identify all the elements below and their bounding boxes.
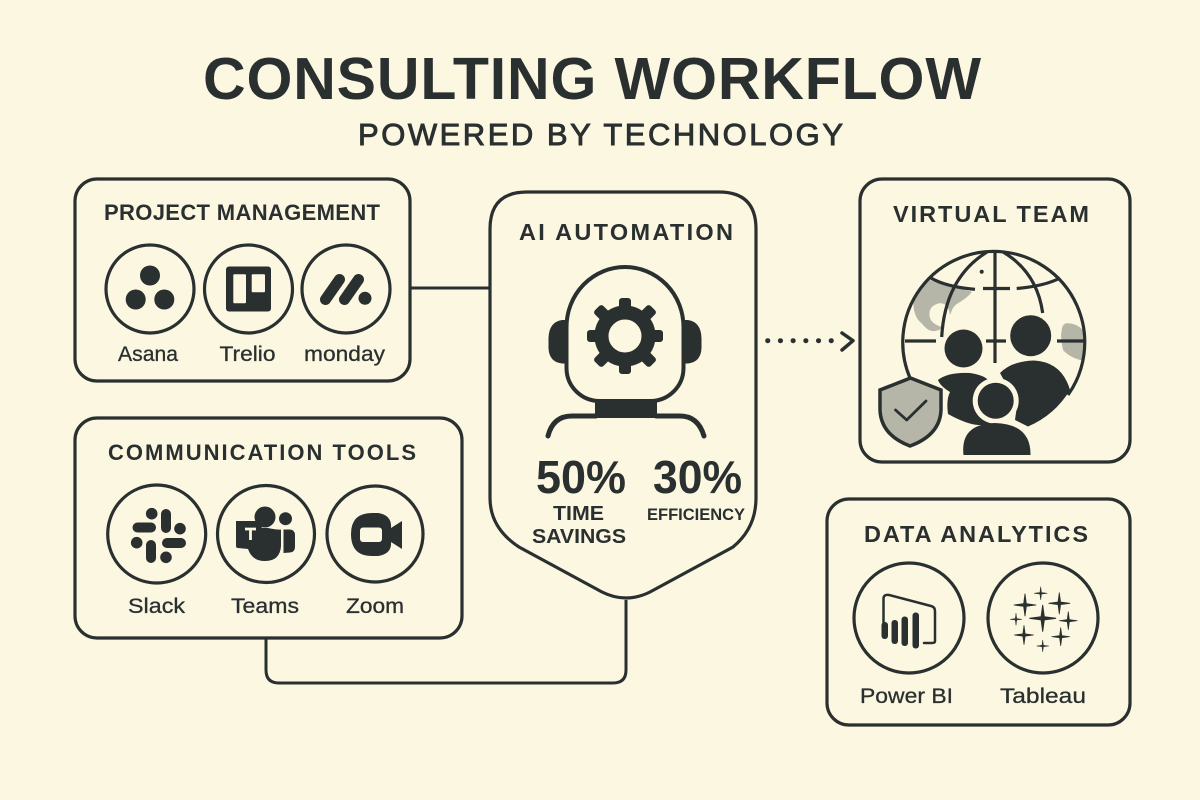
title: CONSULTING WORKFLOW — [203, 46, 981, 112]
panel: communication tools — [75, 418, 462, 638]
illustration: globe with team — [880, 250, 1085, 455]
panel frame — [490, 192, 756, 598]
icon: monday — [302, 245, 390, 333]
shield — [880, 378, 941, 446]
label: Tableau: Tableau — [1000, 684, 1086, 708]
ear right — [682, 320, 702, 364]
panel frame — [860, 179, 1130, 462]
icon: Asana — [106, 245, 194, 333]
icon: Zoom — [327, 486, 423, 582]
stat: 50%: 50% — [536, 451, 626, 503]
stat label: time savings — [532, 503, 626, 548]
panel: data analytics — [827, 499, 1130, 725]
connector: project management to AI automation — [410, 286, 490, 290]
heading: COMMUNICATION TOOLS — [108, 440, 416, 465]
stat label: time savings: SAVINGS — [532, 526, 626, 548]
icon: Teams — [218, 486, 314, 582]
icon: Tableau — [988, 563, 1098, 673]
icon: Power BI — [854, 563, 964, 673]
label: Zoom: Zoom — [346, 594, 404, 618]
heading: DATA ANALYTICS — [864, 521, 1088, 547]
person front — [963, 378, 1031, 455]
shoulders — [548, 416, 704, 436]
label: monday: monday — [304, 342, 385, 366]
heading: PROJECT MANAGEMENT — [104, 200, 381, 225]
label: Asana: Asana — [118, 342, 178, 366]
heading: VIRTUAL TEAM — [893, 201, 1089, 227]
stat: 30%: 30% — [653, 451, 742, 503]
label: Teams: Teams — [231, 594, 299, 618]
label: Slack: Slack — [128, 594, 185, 618]
panel: virtual team — [860, 179, 1130, 462]
stat label: efficiency: EFFICIENCY — [647, 506, 745, 524]
head outline — [566, 267, 684, 401]
arrow: AI automation to virtual team — [768, 333, 853, 350]
heading: AI AUTOMATION — [519, 219, 733, 245]
icon: Slack — [108, 485, 206, 583]
panel: project management — [75, 179, 410, 381]
globe specks — [980, 270, 984, 274]
stat label: time savings: TIME — [553, 503, 604, 525]
label: Power BI: Power BI — [860, 684, 953, 708]
label: Trelio: Trelio — [220, 342, 276, 366]
connector: communication tools to AI automation — [266, 600, 626, 683]
panel frame — [75, 418, 462, 638]
gear — [587, 298, 663, 374]
person right — [1000, 315, 1070, 426]
panel frame — [75, 179, 410, 381]
panel frame — [827, 499, 1130, 725]
person left — [938, 330, 998, 425]
icon: robot head with gear — [548, 267, 704, 436]
neck — [595, 399, 657, 418]
globe land — [913, 280, 972, 331]
subtitle: POWERED BY TECHNOLOGY — [358, 117, 843, 152]
globe grid — [905, 250, 1085, 363]
globe outline — [903, 251, 1085, 395]
icon: Trello — [204, 245, 292, 333]
ear left — [548, 320, 568, 364]
panel: AI automation — [490, 192, 756, 598]
